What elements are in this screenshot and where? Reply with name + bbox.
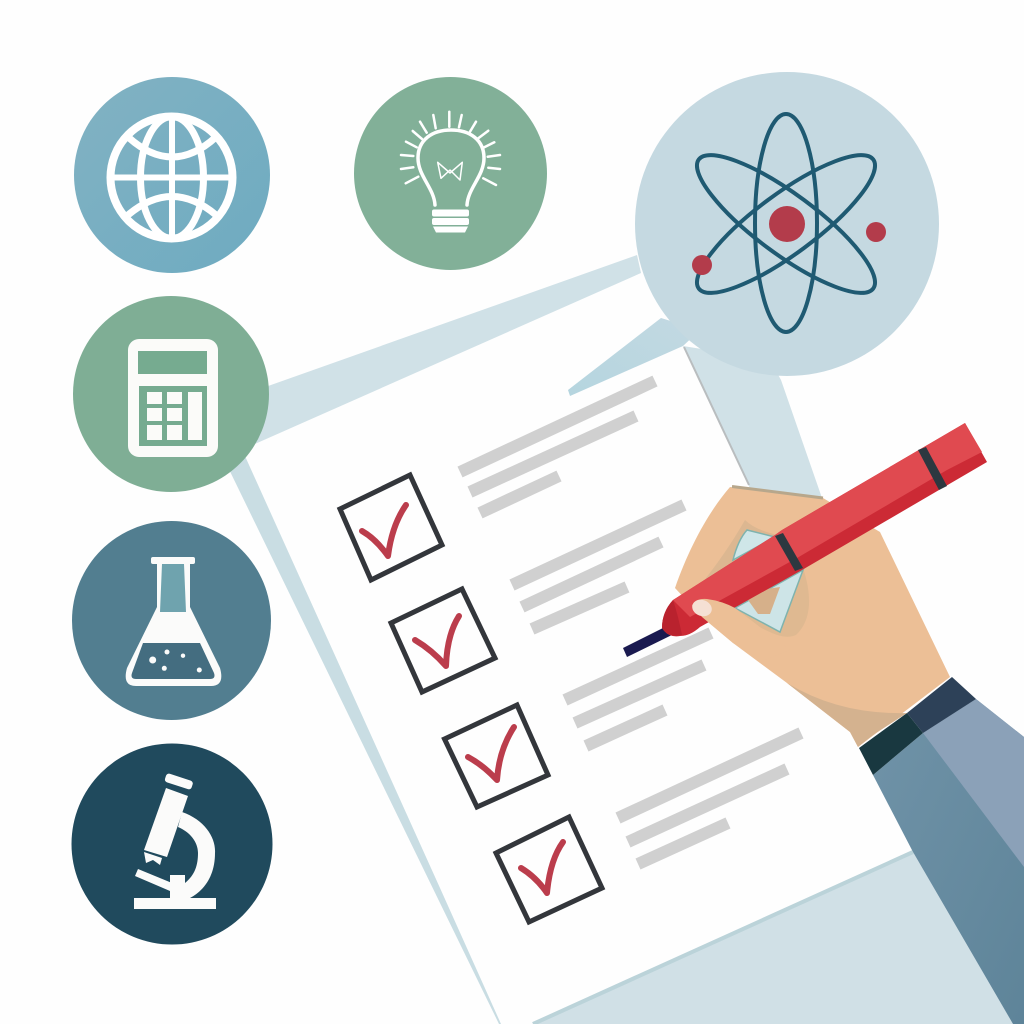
icon: calculator (73, 296, 269, 492)
icon: atom (635, 72, 939, 376)
icon: light bulb (354, 77, 547, 270)
speech pointer (568, 318, 700, 396)
cuff (859, 677, 976, 775)
sleeve (873, 699, 1024, 1024)
icon: globe (74, 77, 270, 273)
checklist row 2 (391, 505, 684, 692)
checklist row 1 (340, 381, 655, 580)
icon: microscope (72, 744, 272, 944)
pen (623, 423, 987, 657)
thumb (692, 599, 790, 660)
icon: flask (72, 521, 271, 720)
checklist row 4 (496, 733, 801, 922)
checklist row 3 (444, 633, 711, 807)
fingernail (690, 597, 714, 619)
clipboard backing (222, 255, 1013, 1024)
hand (675, 486, 950, 747)
